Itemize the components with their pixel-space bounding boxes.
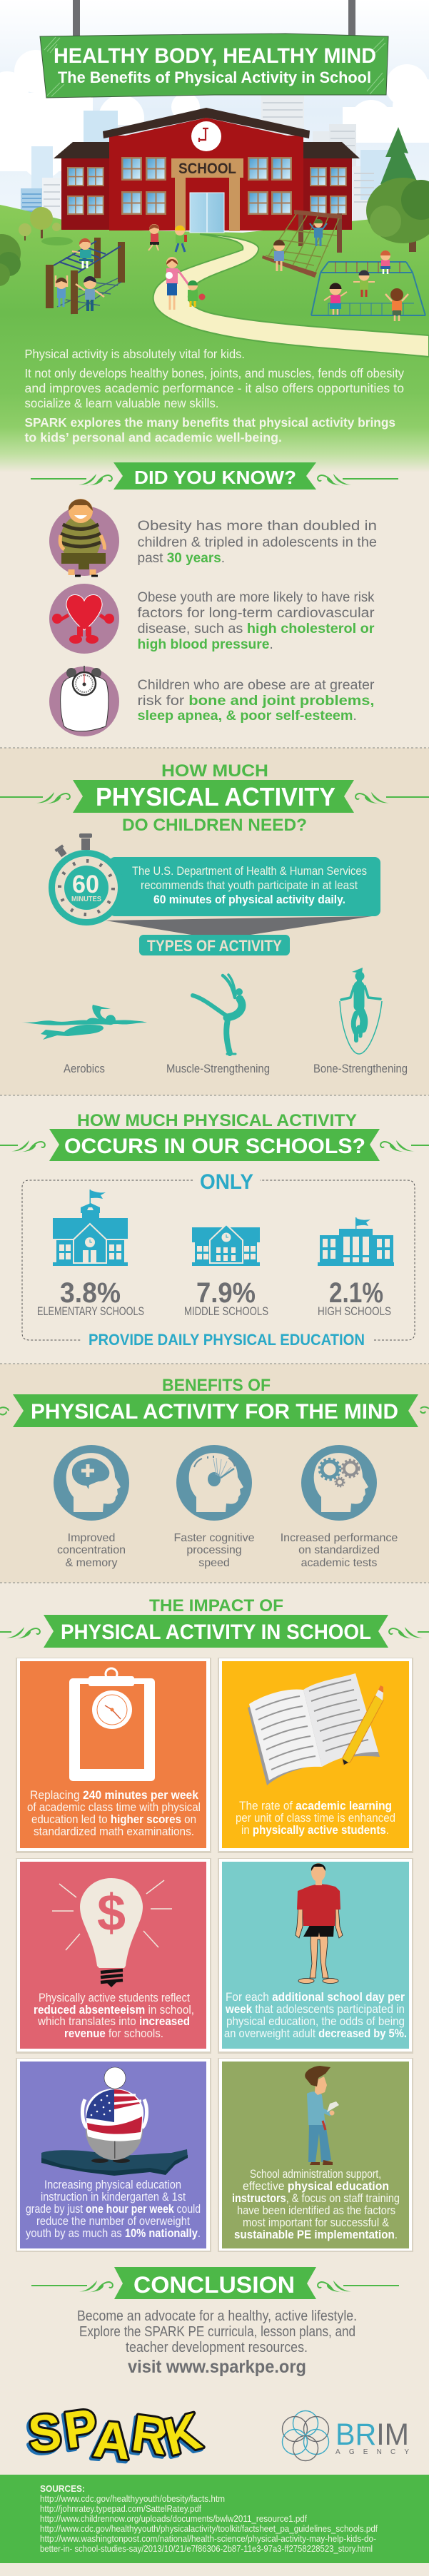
stat: elementary [37, 1277, 144, 1318]
icon: jump rope [340, 968, 382, 1054]
intro text [24, 347, 404, 445]
heading: benefits for the mind [0, 1376, 429, 1427]
intro text: SPARK explores the many benefits that physical activity brings [24, 415, 395, 430]
logo: SPARK: K [159, 2403, 206, 2467]
only label: ONLY [200, 1170, 253, 1194]
icon: stopwatch: 60 [72, 871, 99, 898]
card: pink absenteeism [16, 1858, 211, 2054]
label [281, 1532, 398, 1569]
card text [236, 1800, 395, 1837]
icon: elementary school [53, 1190, 128, 1266]
label [57, 1532, 126, 1569]
fact text: factors for long-term cardiovascular [137, 606, 375, 621]
card text: grade by just one hour per week could [26, 2203, 201, 2216]
icon: book and pencil [248, 1673, 383, 1785]
card: purple kindergarten instruction [16, 2058, 211, 2252]
clock [191, 121, 221, 151]
card text: The rate of academic learning [239, 1800, 392, 1812]
heading: impact of physical activity in school [0, 1596, 429, 1648]
logo: SPARK: S [26, 2403, 64, 2463]
card text: effective physical education [243, 2180, 389, 2193]
heading banner: conclusion: CONCLUSION [133, 2272, 295, 2298]
heading: how much physical activity occurs in our schools [0, 1111, 429, 1161]
benefit: cognitive speed [174, 1445, 255, 1569]
card text: an overweight adult decreased by 5%. [224, 2027, 407, 2040]
icon: head with speedometer [176, 1445, 252, 1521]
card text: physical education, the odds of being [226, 2015, 405, 2028]
label: processing [186, 1544, 242, 1556]
source links: http://johnratey.typepad.com/SattelRatey.pdf [40, 2503, 201, 2514]
label: Bone-Strengthening [313, 1062, 408, 1075]
label: speed [198, 1557, 230, 1569]
card text [232, 2168, 400, 2241]
source links: http://www.washingtonpost.com/national/health-science/physical-activity-may-help-kids-do- [40, 2533, 376, 2544]
school building: SCHOOL [178, 161, 236, 177]
label: & memory [66, 1557, 117, 1569]
heading: benefits for the mind: PHYSICAL ACTIVITY FOR THE MIND [31, 1400, 398, 1424]
icon: swimmer [21, 1005, 147, 1040]
card text: have been identified as the factors [237, 2204, 395, 2217]
fact text: risk for bone and joint problems, [137, 694, 374, 709]
logo: BRIM agency [283, 2410, 409, 2460]
label: Increased performance [281, 1532, 398, 1544]
windows [121, 157, 142, 181]
heading: how much physical activity occurs in our schools: HOW MUCH PHYSICAL ACTIVITY [77, 1111, 357, 1130]
title heading: HEALTHY BODY, HEALTHY MIND [54, 44, 376, 68]
card text [26, 2179, 201, 2240]
skyline buildings [21, 96, 393, 230]
heading: how much physical activity do children need: PHYSICAL ACTIVITY [96, 782, 335, 811]
icon: stopwatch: MINUTES [71, 895, 101, 903]
school building [54, 108, 360, 233]
climbing frame [311, 262, 425, 315]
card text: revenue for schools. [64, 2027, 163, 2040]
label: Improved [68, 1532, 115, 1544]
source links [40, 2493, 378, 2554]
card text: most important for successful & [243, 2216, 389, 2229]
fact text: sleep apnea, & poor self-esteem . [137, 709, 357, 724]
source links: better-in- school-studies-say/2013/10/21/e7f86306-2b87-11e3-97a3-ff2758228523_story.html [40, 2543, 373, 2554]
card text: in physically active students. [241, 1824, 389, 1837]
heading: benefits for the mind: BENEFITS OF [162, 1376, 271, 1395]
card text: Physically active students reflect [39, 1992, 190, 2004]
clouds [0, 50, 429, 178]
heading banner: did you know: DID YOU KNOW? [134, 468, 296, 488]
logo: SPARK [26, 2398, 206, 2470]
logo: SPARK: P [61, 2398, 101, 2460]
hero illustration panel [0, 0, 429, 472]
logo: SPARK: A [91, 2410, 133, 2470]
fact text: children & tripled in adolescents in the [137, 535, 377, 550]
icon: big tree [366, 178, 429, 252]
heading: impact of physical activity in school: PHYSICAL ACTIVITY IN SCHOOL [61, 1621, 371, 1644]
card: teal additional school day [218, 1858, 413, 2054]
section background: benefits [0, 1364, 429, 1583]
icon: clipboard with clock [69, 1668, 155, 1781]
card text [224, 1991, 407, 2040]
source links: http://www.cdc.gov/healthyyouth/physicalactivity/toolkit/factsheet_pa_guidelines_schools.pdf [40, 2523, 378, 2534]
card: orange replacing minutes [16, 1658, 211, 1853]
icon: overweight figure on map [41, 2067, 188, 2176]
recommendation text: 60 minutes of physical activity daily. [153, 893, 345, 906]
heading banner: did you know [31, 462, 398, 490]
icon: stopwatch [49, 833, 124, 926]
label: academic tests [301, 1557, 377, 1569]
icon: dollar light bulb: $ [97, 1885, 126, 1942]
icon: bathroom scale [49, 666, 119, 736]
recommendation callout [49, 833, 380, 935]
icon: overweight child [49, 499, 119, 576]
card text: of academic class time with physical [27, 1801, 201, 1814]
icon: head with gears [301, 1445, 377, 1521]
source links: http://www.childrennow.org/uploads/documents/bwlw2011_resource1.pdf [40, 2513, 307, 2524]
intro text: socialize & learn valuable new skills. [24, 396, 218, 410]
conclusion text: teacher development resources. [126, 2340, 308, 2356]
card text [34, 1992, 194, 2040]
icon: standing man [296, 1863, 343, 1984]
heading banner: conclusion [31, 2267, 399, 2299]
card: olive school administration [218, 2058, 413, 2252]
card text: reduce the number of overweight [36, 2215, 190, 2228]
grass hills [0, 205, 429, 472]
fact text [137, 590, 375, 652]
label: Faster cognitive [174, 1532, 255, 1544]
card text: instruction in kindergarten & 1st [41, 2191, 186, 2204]
fact: cardiovascular [49, 584, 375, 654]
fact text [137, 678, 375, 724]
benefit: concentration [54, 1445, 129, 1569]
stat: middle: MIDDLE SCHOOLS [184, 1304, 268, 1318]
fact text: disease, such as high cholesterol or [137, 622, 375, 637]
intro text: It not only develops healthy bones, joints, and muscles, fends off obesity [24, 366, 404, 380]
source links: http://www.cdc.gov/healthyyouth/obesity/facts.htm [40, 2493, 225, 2504]
activity: aerobics [21, 1005, 147, 1075]
fact text [137, 519, 377, 566]
label: Muscle-Strengthening [166, 1062, 270, 1075]
card text: which translates into increased [37, 2015, 190, 2028]
icon: dollar light bulb [52, 1878, 172, 1987]
icon: small trees left [0, 207, 73, 286]
fact text: high blood pressure. [137, 637, 273, 652]
statistics panel [22, 1170, 415, 1349]
card: yellow academic learning [218, 1658, 413, 1853]
sources heading: SOURCES: [40, 2483, 85, 2494]
icon: head with brain [54, 1445, 129, 1521]
stat: middle: 7.9% [196, 1277, 256, 1309]
card text: instructors, & focus on staff training [232, 2192, 400, 2205]
fact text: Children who are obese are at greater [137, 678, 375, 693]
heading: how much physical activity do children need [0, 761, 429, 835]
card text [27, 1789, 201, 1838]
stat: middle [184, 1277, 268, 1318]
recommendation text [132, 864, 367, 906]
stat: high [318, 1277, 391, 1318]
school porch [175, 178, 186, 231]
recommendation text: The U.S. Department of Health & Human Services [132, 864, 367, 878]
heading: how much physical activity do children need: DO CHILDREN NEED? [122, 816, 307, 835]
intro text: Physical activity is absolutely vital for kids. [24, 347, 245, 361]
fact: obesity [49, 499, 377, 576]
card text: sustainable PE implementation. [234, 2228, 398, 2241]
subtitle: The Benefits of Physical Activity in School [58, 69, 371, 86]
icon: middle school [192, 1224, 260, 1266]
stat: high: HIGH SCHOOLS [318, 1304, 391, 1318]
intro text: to kids’ personal and academic well-being. [24, 430, 282, 445]
benefit: academic performance [281, 1445, 398, 1569]
conclusion text: Explore the SPARK PE curricula, lesson plans, and [79, 2324, 355, 2340]
card text: youth by as much as 10% nationally. [26, 2227, 201, 2240]
activity: bone-strengthening [313, 968, 408, 1075]
stat: high: 2.1% [329, 1277, 383, 1309]
conclusion text [77, 2308, 357, 2377]
intro text: and improves academic performance - it also offers opportunities to [24, 381, 404, 395]
label: on standardized [298, 1544, 380, 1556]
provide label: PROVIDE DAILY PHYSICAL EDUCATION [89, 1331, 365, 1349]
children playing [56, 219, 408, 321]
card text: Increasing physical education [44, 2179, 181, 2191]
icon: overlapping circles [283, 2410, 328, 2460]
label: concentration [57, 1544, 126, 1556]
fact text: Obese youth are more likely to have risk [137, 590, 375, 605]
card text: week that adolescents participated in [225, 2003, 405, 2016]
title sign [40, 34, 388, 98]
card text: standardized math examinations. [34, 1825, 194, 1838]
fact text: Obesity has more than doubled in [137, 519, 377, 534]
label: Aerobics [64, 1062, 105, 1075]
sources band [0, 2475, 429, 2563]
label [174, 1532, 255, 1569]
conclusion text: Become an advocate for a healthy, active lifestyle. [77, 2308, 357, 2324]
section background: how much [0, 748, 429, 1095]
icon: tall conifer tree [380, 127, 418, 184]
fact: bone and joint [49, 666, 375, 736]
card text: Replacing 240 minutes per week [30, 1789, 199, 1802]
heading: how much physical activity do children need: HOW MUCH [161, 761, 268, 781]
icon: gymnast [193, 975, 243, 1054]
activity: muscle-strengthening [166, 975, 270, 1075]
logo: BRIM agency: AGENCY [335, 2448, 409, 2456]
card text: per unit of class time is enhanced [236, 1812, 395, 1825]
card text: reduced absenteeism in school, [34, 2004, 194, 2017]
heading: how much physical activity occurs in our schools: OCCURS IN OUR SCHOOLS? [64, 1135, 365, 1158]
heading: impact of physical activity in school: THE IMPACT OF [149, 1596, 283, 1616]
fact text: past 30 years. [137, 551, 225, 566]
logo: BRIM agency: BRIM [335, 2418, 409, 2452]
stat: elementary: ELEMENTARY SCHOOLS [37, 1304, 144, 1318]
card text: For each additional school day per [226, 1991, 405, 2004]
icon: heart character [49, 584, 119, 654]
types of activity label: TYPES OF ACTIVITY [147, 937, 282, 955]
icon: winding path [153, 234, 429, 357]
climbing net [262, 210, 342, 278]
card text: School administration support, [250, 2168, 381, 2181]
conclusion text: visit www.sparkpe.org [128, 2357, 306, 2377]
logo: SPARK: R [128, 2405, 171, 2466]
card text: education led to higher scores on [31, 1813, 196, 1826]
icon: teacher with clipboard [305, 2066, 339, 2165]
icon: sign posts [73, 0, 355, 36]
stat: elementary: 3.8% [60, 1277, 121, 1309]
monkey bars [46, 238, 125, 314]
icon: high school [318, 1217, 394, 1266]
recommendation text: recommends that youth participate in at least [141, 878, 358, 892]
